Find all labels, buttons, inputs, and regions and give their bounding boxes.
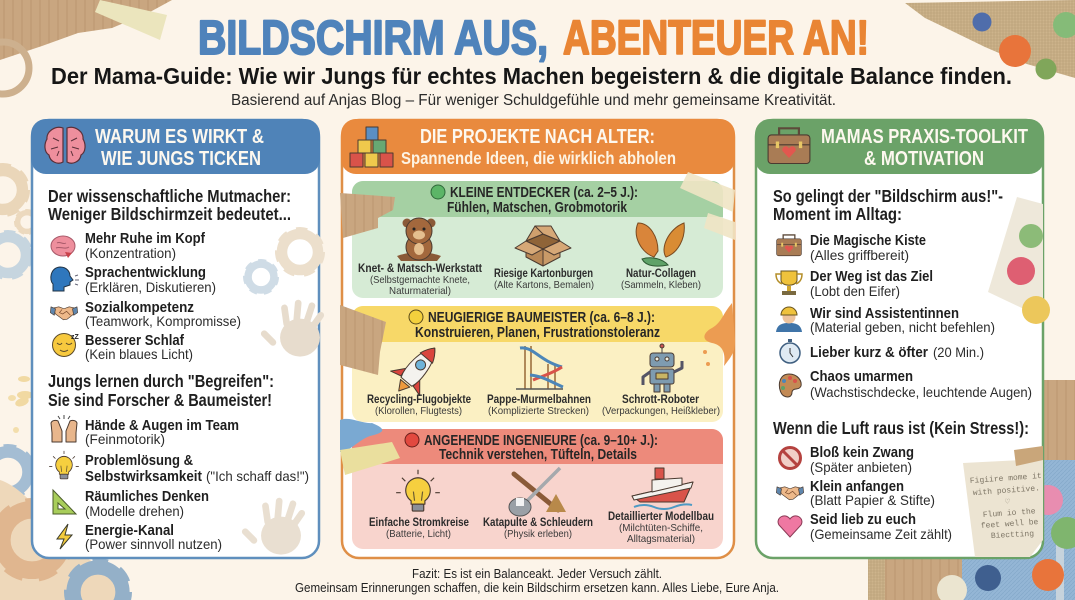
item: lieb (810, 511, 952, 542)
icon: no sign (780, 448, 800, 468)
header text (95, 125, 264, 170)
footer: Fazit: Es ist ein Balanceakt. Jeder Versuch zählt. (412, 566, 662, 581)
note paper: Flum io the (983, 507, 1036, 520)
header text: & MOTIVATION (864, 147, 984, 170)
label: katapulte (483, 517, 593, 540)
icon: blocks (350, 127, 393, 167)
note paper: Figiire mome it (970, 472, 1042, 486)
item: kurz: (20 Min.) (933, 344, 984, 360)
icon: bear (397, 218, 441, 261)
label: knete (358, 263, 482, 297)
heading: so gelingt: Moment im Alltag: (773, 204, 902, 224)
label: natur (621, 268, 701, 291)
subtitle: Der Mama-Guide: Wie wir Jungs für echtes Machen begeistern & die digitale Balance finden. (51, 63, 1012, 89)
item: Problemlösung: Problemlösung & (85, 452, 193, 469)
item: Schlaf: (Kein blaues Licht) (85, 346, 193, 362)
icon: heart (778, 516, 802, 537)
icon: raised hands (51, 415, 77, 442)
section: angehende ingenieure (352, 429, 723, 549)
decoration: fabric with buttons (988, 197, 1050, 324)
item: Schlaf (85, 332, 193, 362)
section heading: NEUGIERIGE BAUMEISTER (ca. 6–8 J.): (428, 309, 655, 326)
status dot green (431, 185, 445, 199)
source line: Basierend auf Anjas Blog – Für weniger Schuldgefühle und mehr gemeinsame Kreativität. (231, 92, 836, 109)
decoration: cardboard, denim and buttons bottom right (868, 380, 1075, 600)
item: chaos: (Wachstischdecke, leuchtende Augen) (810, 384, 1032, 400)
item: kiste: Die Magische Kiste (810, 232, 926, 249)
item: Problemlösung: ("Ich schaff das!") (206, 468, 309, 484)
item: Sprache: (Erklären, Diskutieren) (85, 279, 216, 295)
item: Ruhe: (Konzentration) (85, 245, 176, 261)
heading: Begreifen (48, 371, 274, 410)
section heading: Technik verstehen, Tüfteln, Details (439, 446, 637, 463)
item: kiste (810, 232, 926, 263)
label: katapulte: (Physik erleben) (504, 528, 572, 540)
icon: speaking head (51, 267, 79, 291)
label: flugobjekte (367, 394, 471, 417)
decoration: tape, cardboard and splashes over sections (340, 172, 735, 475)
item: chaos (810, 368, 1032, 400)
label: flugobjekte: Recycling-Flugobjekte (367, 394, 471, 406)
label: modellbau: Detaillierter Modellbau (608, 511, 714, 523)
label: natur: Natur-Collagen (626, 268, 696, 280)
icon: sleeping face (52, 334, 80, 356)
label: knete: Knet- & Matsch-Werkstatt (358, 263, 482, 275)
title (198, 12, 869, 65)
icon: toolbox (768, 128, 810, 164)
item: Sozial: (Teamwork, Kompromisse) (85, 313, 241, 329)
status dot red (405, 433, 419, 447)
item: assistentinnen (810, 305, 995, 335)
label: karton: (Alte Kartons, Bemalen) (494, 279, 594, 291)
label: roboter: (Verpackungen, Heißkleber) (602, 405, 720, 417)
item: Sprache: Sprachentwicklung (85, 264, 206, 281)
item: Energie (85, 522, 222, 552)
item: Problemlösung: Selbstwirksamkeit (85, 468, 202, 485)
title: ABENTEUER AN! (563, 12, 869, 65)
heading: so gelingt: So gelingt der "Bildschirm aus!"- (773, 186, 1003, 206)
label: stromkreise: Einfache Stromkreise (369, 517, 469, 529)
icon: handshake (50, 307, 78, 320)
icon: leaves (636, 223, 684, 266)
item: kurz: Lieber kurz & öfter (810, 344, 928, 361)
item: zwang: Bloß kein Zwang (810, 444, 914, 461)
item: Energie: Energie-Kanal (85, 522, 174, 539)
item: Hände (85, 417, 239, 447)
icon: rocket (384, 336, 449, 403)
header text: WIE JUNGS TICKEN (101, 147, 261, 170)
label: murmelbahn (487, 394, 591, 417)
item: klein (810, 478, 935, 508)
header text: MAMAS PRAXIS-TOOLKIT (821, 125, 1028, 148)
item: Ruhe (85, 230, 206, 261)
heading: Begreifen: Sie sind Forscher & Baumeister! (48, 390, 272, 410)
label: stromkreise (369, 517, 469, 540)
icon: sleeping face: zZ (71, 334, 80, 341)
label: karton: Riesige Kartonburgen (494, 268, 593, 280)
item: zwang: (Später anbieten) (810, 459, 912, 475)
icon: handshake small (776, 487, 804, 500)
heading: Mutmacher (48, 186, 291, 224)
heading: so gelingt (773, 186, 1003, 224)
header text (401, 125, 676, 168)
note paper: with positive. (973, 484, 1040, 498)
section heading (415, 309, 660, 341)
header text: WARUM ES WIRKT & (95, 125, 264, 148)
label: modellbau: (Milchtüten-Schiffe, (619, 522, 703, 534)
item: Sozial: Sozialkompetenz (85, 299, 194, 316)
panel header (341, 119, 735, 174)
panel header (31, 119, 320, 174)
section heading (447, 184, 638, 216)
item: zwang (810, 444, 914, 475)
heading: Mutmacher: Der wissenschaftliche Mutmacher: (48, 186, 291, 206)
panel header (755, 119, 1044, 174)
item: Sozial (85, 299, 241, 329)
item: weg (810, 268, 933, 299)
decoration: gears and hand prints in panel (241, 230, 325, 555)
label: flugobjekte: (Klorollen, Flugtests) (375, 405, 462, 417)
panel: projekte (295, 119, 1050, 595)
heading: Begreifen: Jungs lernen durch "Begreifen": (48, 371, 274, 391)
icon: marble run (516, 346, 563, 389)
status dot yellow (409, 310, 423, 324)
icon: brain (45, 127, 85, 163)
label: modellbau: Alltagsmaterial) (627, 533, 695, 545)
item: weg: (Lobt den Eifer) (810, 283, 900, 299)
icon: set square (53, 490, 76, 514)
label: modellbau (608, 511, 714, 545)
item: Energie: (Power sinnvoll nutzen) (85, 536, 222, 552)
label: murmelbahn: Pappe-Murmelbahnen (487, 394, 591, 406)
section heading: Fühlen, Matschen, Grobmotorik (447, 199, 628, 216)
label: murmelbahn: (Komplizierte Strecken) (488, 405, 589, 417)
label: roboter (602, 394, 720, 417)
item: Schlaf: Besserer Schlaf (85, 332, 185, 349)
icon: light bulb (49, 451, 79, 479)
icon: bulb large (396, 470, 440, 511)
item: assistentinnen: (Material geben, nicht befehlen) (810, 319, 995, 335)
item: chaos: Chaos umarmen (810, 368, 913, 385)
decoration: cardboard top left (0, 0, 172, 94)
section: kleine entdecker (352, 181, 723, 298)
section heading (424, 432, 658, 463)
icon: stopwatch (780, 339, 800, 363)
item: Räumlich: Räumliches Denken (85, 488, 209, 505)
icon: catapult spoon (509, 468, 566, 516)
icon: trophy (776, 271, 802, 295)
label: natur: (Sammeln, Kleben) (621, 279, 701, 291)
label: knete: Naturmaterial) (389, 285, 451, 297)
icon: palette (779, 374, 801, 397)
footer (295, 566, 779, 595)
heading: Mutmacher: Weniger Bildschirmzeit bedeutet... (48, 204, 291, 224)
item: lieb: (Gemeinsame Zeit zählt) (810, 526, 952, 542)
footer: Gemeinsam Erinnerungen schaffen, die kein Bildschirm ersetzen kann. Alles Liebe, Eure Anja. (295, 580, 779, 595)
header text: Spannende Ideen, die wirklich abholen (401, 148, 676, 168)
item: Hände: (Feinmotorik) (85, 431, 165, 447)
item: Problemlösung (85, 452, 309, 485)
label: knete: (Selbstgemachte Knete, (370, 274, 470, 286)
icon: cardboard box (515, 226, 571, 266)
item: assistentinnen: Wir sind Assistentinnen (810, 305, 959, 322)
title: BILDSCHIRM AUS, (198, 12, 548, 65)
icon: builder (776, 307, 802, 332)
item: Räumlich: (Modelle drehen) (85, 503, 184, 519)
note paper: ♡ (1005, 498, 1010, 507)
heading: luft raus: Wenn die Luft raus ist (Kein Stress!): (773, 418, 1029, 438)
header text: DIE PROJEKTE NACH ALTER: (420, 125, 655, 148)
item: Ruhe: Mehr Ruhe im Kopf (85, 230, 206, 247)
decoration: gears left (0, 167, 130, 600)
header text (821, 125, 1028, 170)
item: Hände: Hände & Augen im Team (85, 417, 239, 434)
section heading: ANGEHENDE INGENIEURE (ca. 9–10+ J.): (424, 432, 658, 449)
panel: toolkit (755, 119, 1050, 558)
item: klein: (Blatt Papier & Stifte) (810, 492, 935, 508)
icon: lightning (57, 524, 72, 549)
item: lieb: Seid lieb zu euch (810, 511, 916, 528)
section heading: Konstruieren, Planen, Frustrationstoleranz (415, 324, 660, 341)
icon: brain small (51, 236, 75, 258)
note paper: feet well be (981, 518, 1039, 531)
label: karton (494, 268, 594, 291)
section heading: KLEINE ENTDECKER (ca. 2–5 J.): (450, 184, 638, 201)
item: klein: Klein anfangen (810, 478, 904, 495)
item: weg: Der Weg ist das Ziel (810, 268, 933, 285)
item: Sprache (85, 264, 216, 295)
note paper (963, 446, 1043, 557)
label: roboter: Schrott-Roboter (622, 394, 699, 406)
label: katapulte: Katapulte & Schleudern (483, 517, 593, 529)
section: neugierige baumeister (352, 306, 723, 422)
decoration: burlap and buttons top right (905, 0, 1075, 80)
item: Räumlich (85, 488, 209, 519)
note paper: Biectting (991, 530, 1035, 541)
item: kiste: (Alles griffbereit) (810, 247, 909, 263)
icon: robot (643, 344, 682, 392)
icon: boat (632, 468, 693, 509)
icon: toolbox small (777, 235, 801, 256)
panel: warum es wirkt (31, 119, 325, 558)
label: stromkreise: (Batterie, Licht) (386, 528, 451, 540)
